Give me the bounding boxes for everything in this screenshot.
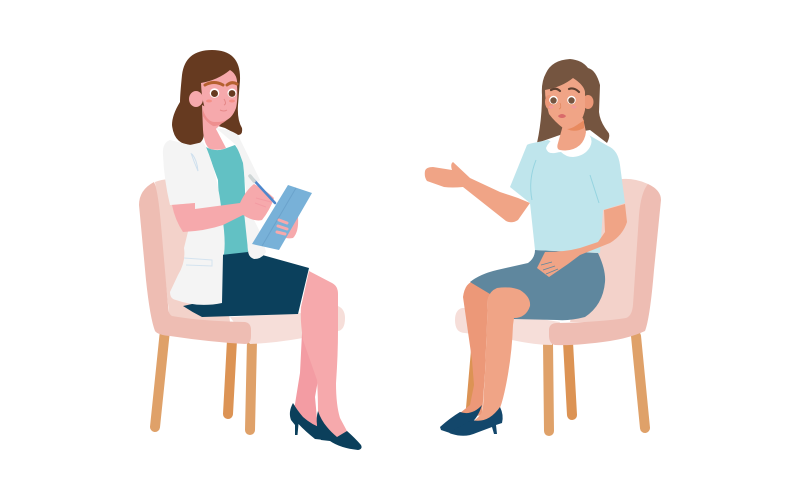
hair <box>537 59 609 143</box>
cheeks <box>206 100 212 102</box>
writing arm <box>172 184 274 232</box>
coat pocket <box>184 258 212 266</box>
lap arm and hand <box>537 204 627 277</box>
front leg <box>472 287 530 424</box>
chin shadow <box>203 110 227 126</box>
chin shadow <box>563 120 584 131</box>
teal top <box>206 145 248 255</box>
right chair <box>455 179 661 431</box>
tablet <box>252 185 312 250</box>
far hand <box>275 217 298 238</box>
eyebrows <box>205 82 237 85</box>
eyes <box>210 88 219 98</box>
coat strip and cuff <box>244 212 266 259</box>
left chair <box>139 179 345 430</box>
front leg <box>301 271 348 439</box>
ear <box>582 95 594 109</box>
left side hair shadow on cheek <box>545 95 553 109</box>
blouse <box>510 134 625 253</box>
skirt <box>183 251 309 317</box>
ear <box>189 91 203 107</box>
gesturing arm <box>425 162 530 222</box>
face <box>545 78 585 129</box>
coat fold <box>191 153 198 171</box>
finger lines <box>541 262 558 274</box>
neck <box>202 105 227 150</box>
right woman: patient <box>425 59 627 436</box>
white coat <box>163 128 260 305</box>
front shoe <box>317 411 362 450</box>
pen <box>251 177 275 203</box>
left woman: therapist <box>163 50 362 450</box>
back leg <box>293 308 318 430</box>
face <box>201 70 237 122</box>
hair back <box>172 50 242 145</box>
skirt <box>470 250 605 320</box>
fingers <box>277 220 287 234</box>
back shoe <box>440 405 482 433</box>
back leg <box>460 281 497 418</box>
mouth <box>558 114 566 118</box>
nose and mouth <box>220 99 227 111</box>
eyebrows <box>551 88 579 92</box>
front shoe <box>449 407 503 436</box>
collar <box>546 132 592 157</box>
nose <box>559 103 561 109</box>
blouse folds <box>531 160 599 203</box>
cheeks <box>548 106 554 108</box>
back shoe <box>290 403 325 440</box>
neck <box>557 118 586 150</box>
eyes <box>549 96 558 104</box>
